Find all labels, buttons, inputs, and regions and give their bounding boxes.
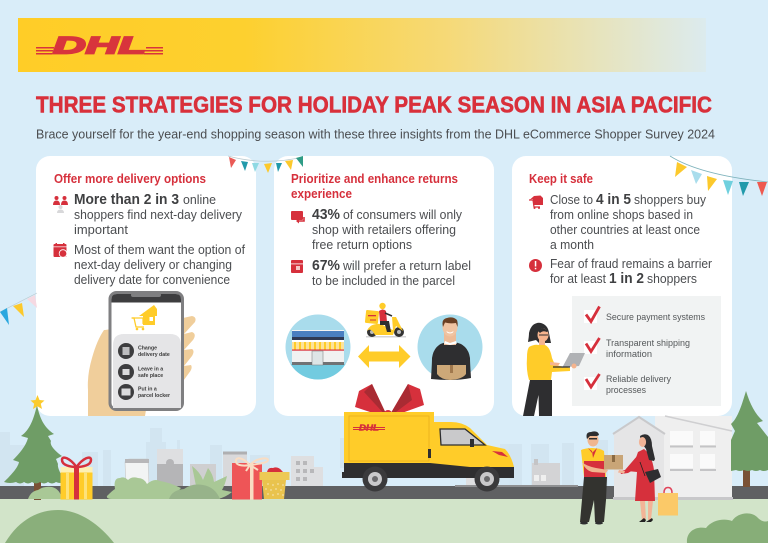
- christmas tree left: [4, 395, 65, 500]
- item: transparent shipping: Transparent shipping: [606, 338, 690, 349]
- stat text: from online shops based in: [550, 207, 693, 222]
- stat text: to be included in the parcel: [312, 273, 455, 288]
- star: [30, 395, 44, 409]
- van rear wheel: [362, 466, 388, 492]
- stat text: [312, 258, 471, 288]
- item: secure payment: [584, 306, 705, 323]
- gift gold: [260, 467, 290, 499]
- van logo: [353, 424, 385, 432]
- stat text: of consumers will only: [343, 207, 462, 222]
- stat text: 67%: [312, 258, 340, 274]
- stat text: 1 in 2: [609, 271, 644, 287]
- phone in hand: delivery date: [138, 352, 170, 358]
- delivery man: [580, 431, 608, 524]
- stat text: a month: [550, 237, 594, 252]
- bunting: left: [0, 293, 37, 325]
- stat text: [550, 256, 713, 287]
- item: transparent shipping: [584, 338, 690, 360]
- stat text: shop with retailers offering: [312, 222, 456, 237]
- van front wheel: [474, 466, 500, 492]
- card: keep it safe: [512, 156, 732, 416]
- header band with DHL logo: [18, 18, 706, 72]
- illustration: courier on scooter: [365, 303, 406, 338]
- hill bottom left: [5, 510, 114, 543]
- stat text: [550, 192, 706, 252]
- bush dark center: [169, 484, 220, 499]
- item: reliable delivery: [584, 374, 671, 396]
- option text: Most of them want the option of: [74, 242, 245, 257]
- bush bottom right: [687, 513, 768, 543]
- icon: calendar: [54, 243, 67, 257]
- bunting: top between cards: [228, 156, 303, 173]
- illustration: customer with parcel: [418, 314, 482, 380]
- phone in hand: [88, 292, 196, 416]
- pine tree right: [731, 391, 768, 487]
- gift red: [232, 458, 268, 500]
- gift yellow: [60, 458, 92, 500]
- icon: people: [53, 196, 68, 213]
- stat text: 4 in 5: [596, 192, 631, 208]
- icon: label box: [291, 260, 303, 273]
- item: transparent shipping: information: [606, 349, 652, 360]
- icon: warning: [529, 259, 542, 272]
- house: [613, 416, 733, 500]
- item: secure payment: Secure payment systems: [606, 312, 705, 323]
- stat text: More than 2 in 3: [74, 192, 179, 208]
- subtitle: Brace yourself for the year-end shopping season with these three insights from the DHL eCommerce Shopper Survey 2024: [36, 128, 715, 142]
- stat text: 43%: [312, 207, 340, 223]
- card: returns experience: [274, 156, 494, 416]
- checklist panel: [572, 296, 721, 406]
- illustration: woman with laptop: [523, 323, 585, 416]
- phone in hand: parcel locker: [138, 393, 170, 399]
- stat text: important: [74, 222, 128, 237]
- stat text: free return options: [312, 237, 412, 252]
- illustration: store: [286, 314, 350, 380]
- bunting: right: [670, 156, 768, 196]
- double arrow: [358, 345, 410, 368]
- heading: Keep it safe: [529, 171, 593, 186]
- ground: [0, 499, 768, 543]
- header band with DHL logo: DHL: [53, 32, 146, 60]
- bushes by left gift: [28, 487, 62, 499]
- heading: Prioritize and enhance returns: [291, 171, 458, 186]
- heading: experience: [291, 186, 352, 201]
- stat text: Close to: [550, 192, 593, 207]
- road: [0, 486, 768, 500]
- shopping bag: [658, 488, 678, 516]
- option text: delivery date for convenience: [74, 272, 230, 287]
- stat text: Fear of fraud remains a barrier: [550, 256, 713, 271]
- bow: [355, 384, 424, 418]
- stat text: for at least: [550, 271, 606, 286]
- buildings: street left: [125, 449, 578, 487]
- option text: next-day delivery or changing: [74, 257, 232, 272]
- stat text: will prefer a return label: [342, 258, 471, 273]
- parcel: [604, 455, 623, 470]
- stat text: shoppers: [647, 271, 697, 286]
- icon: return parcel: [291, 211, 304, 224]
- bush center: [107, 477, 181, 499]
- stat text: shoppers buy: [634, 192, 706, 207]
- delivery van: [342, 384, 514, 492]
- woman customer: [618, 434, 661, 522]
- stat text: [74, 192, 242, 237]
- option text: [74, 242, 245, 287]
- stat text: other countries at least once: [550, 222, 700, 237]
- heading: Offer more delivery options: [54, 171, 206, 186]
- bush leaves center: [170, 466, 232, 499]
- stat text: [312, 207, 462, 252]
- phone in hand: Put in a: [138, 386, 157, 392]
- title: THREE STRATEGIES FOR HOLIDAY PEAK SEASON IN ASIA PACIFIC: [36, 92, 712, 118]
- phone in hand: safe place: [138, 373, 163, 379]
- van logo: DHL: [359, 424, 379, 432]
- stat text: online: [183, 192, 216, 207]
- icon: cross-border shop: [529, 196, 543, 209]
- item: reliable delivery: processes: [606, 385, 646, 396]
- heading: [291, 171, 458, 201]
- stat text: shoppers find next-day delivery: [74, 207, 242, 222]
- skyline background: [0, 428, 608, 486]
- phone in hand: Change: [138, 346, 157, 352]
- item: reliable delivery: Reliable delivery: [606, 374, 671, 385]
- phone in hand: Leave in a: [138, 366, 163, 372]
- card: offer more delivery options: [36, 156, 256, 416]
